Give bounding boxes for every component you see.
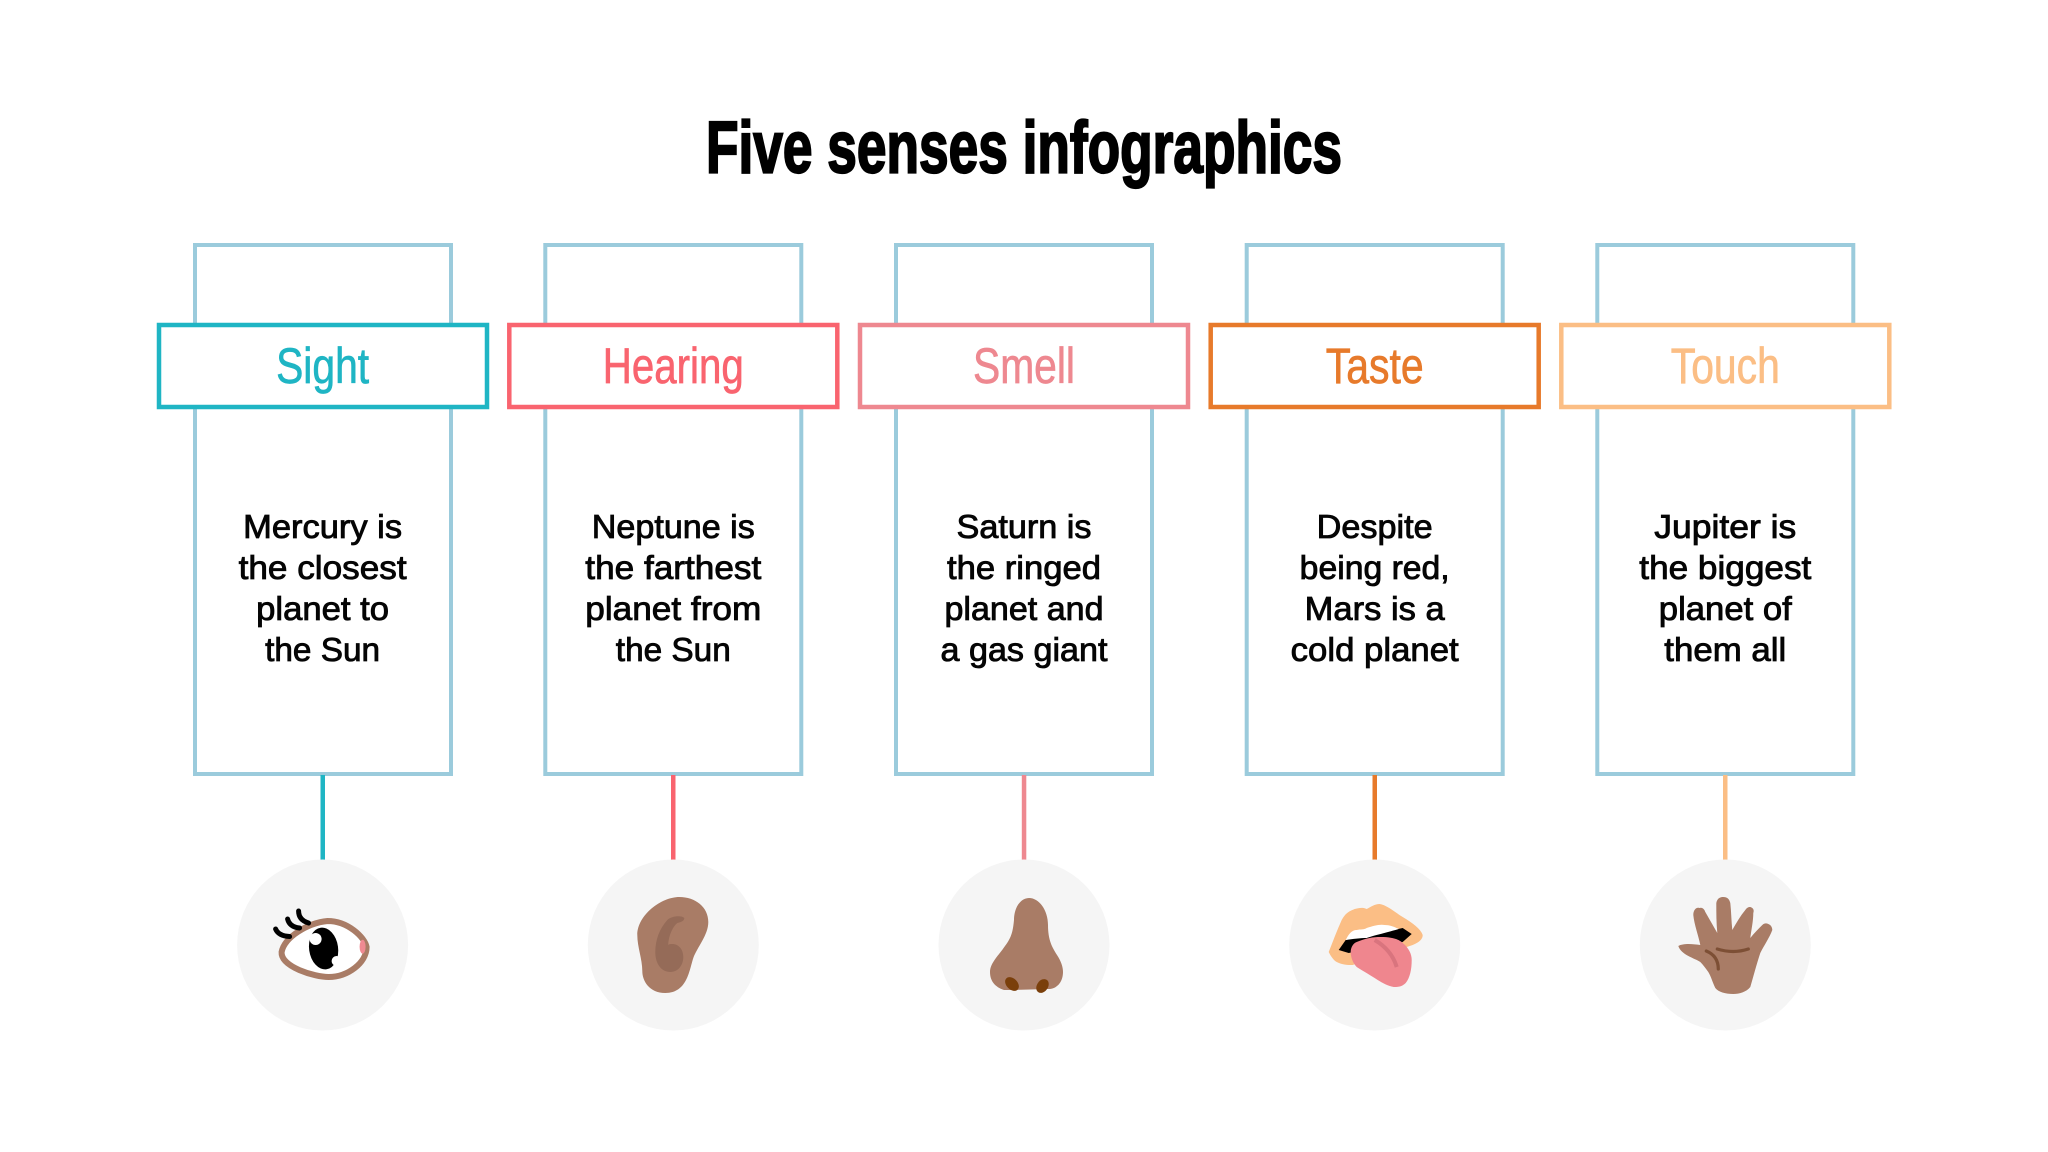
text block: touch bbox=[1639, 508, 1811, 668]
panel: touch bbox=[1561, 245, 1889, 1030]
text block: sight: the Sun bbox=[265, 631, 380, 668]
panel outline bbox=[195, 245, 451, 774]
text block: hearing: planet from bbox=[585, 590, 761, 627]
heading box: Sight bbox=[159, 325, 487, 407]
text block: hearing: the farthest bbox=[585, 549, 761, 586]
text block: sight: the closest bbox=[239, 549, 407, 586]
icon: mouth and tongue bbox=[1289, 860, 1460, 1030]
connector line bbox=[1723, 775, 1728, 860]
panel: sight bbox=[159, 245, 487, 1030]
panel outline bbox=[1247, 245, 1503, 774]
text block: smell bbox=[940, 508, 1108, 668]
text block: touch: them all bbox=[1664, 631, 1786, 668]
panel outline bbox=[545, 245, 801, 774]
heading box: Hearing: Hearing bbox=[603, 338, 744, 394]
heading box: Taste bbox=[1211, 325, 1539, 407]
text block: touch: the biggest bbox=[1639, 549, 1811, 586]
text block: taste bbox=[1291, 508, 1459, 668]
heading box: Taste: Taste bbox=[1326, 338, 1424, 394]
text block: smell: a gas giant bbox=[940, 631, 1108, 668]
heading box: Sight: Sight bbox=[276, 338, 369, 394]
panel outline bbox=[1597, 245, 1853, 774]
text block: taste: Mars is a bbox=[1305, 590, 1445, 627]
text block: smell: Saturn is bbox=[956, 508, 1092, 545]
text block: smell: planet and bbox=[944, 590, 1104, 627]
text block: touch: Jupiter is bbox=[1654, 508, 1796, 545]
title: Five senses infographics bbox=[706, 108, 1342, 188]
connector line bbox=[320, 775, 325, 860]
panel: taste bbox=[1211, 245, 1539, 1030]
text block: hearing: the Sun bbox=[616, 631, 731, 668]
panel: hearing bbox=[509, 245, 837, 1030]
icon: nose bbox=[938, 860, 1110, 1030]
icon: ear bbox=[588, 860, 759, 1030]
text block: sight: planet to bbox=[256, 590, 389, 627]
icon: eye bbox=[237, 860, 408, 1030]
panel outline bbox=[896, 245, 1152, 774]
text block: sight: Mercury is bbox=[243, 508, 402, 545]
text block: hearing: Neptune is bbox=[592, 508, 755, 545]
text block: taste: cold planet bbox=[1291, 631, 1459, 668]
heading box: Hearing bbox=[509, 325, 837, 407]
text block: sight bbox=[239, 508, 407, 668]
panel: smell bbox=[860, 245, 1188, 1030]
icon: hand bbox=[1640, 860, 1811, 1030]
heading box: Smell bbox=[860, 325, 1188, 407]
connector line bbox=[671, 775, 676, 860]
heading box: Touch: Touch bbox=[1671, 338, 1780, 394]
text block: taste: being red, bbox=[1300, 549, 1450, 586]
text block: smell: the ringed bbox=[947, 549, 1101, 586]
heading box: Smell: Smell bbox=[973, 338, 1075, 394]
connector line bbox=[1372, 775, 1377, 860]
connector line bbox=[1022, 775, 1026, 860]
text block: taste: Despite bbox=[1317, 508, 1433, 545]
text block: hearing bbox=[585, 508, 761, 668]
text block: touch: planet of bbox=[1659, 590, 1793, 627]
heading box: Touch bbox=[1561, 325, 1889, 407]
